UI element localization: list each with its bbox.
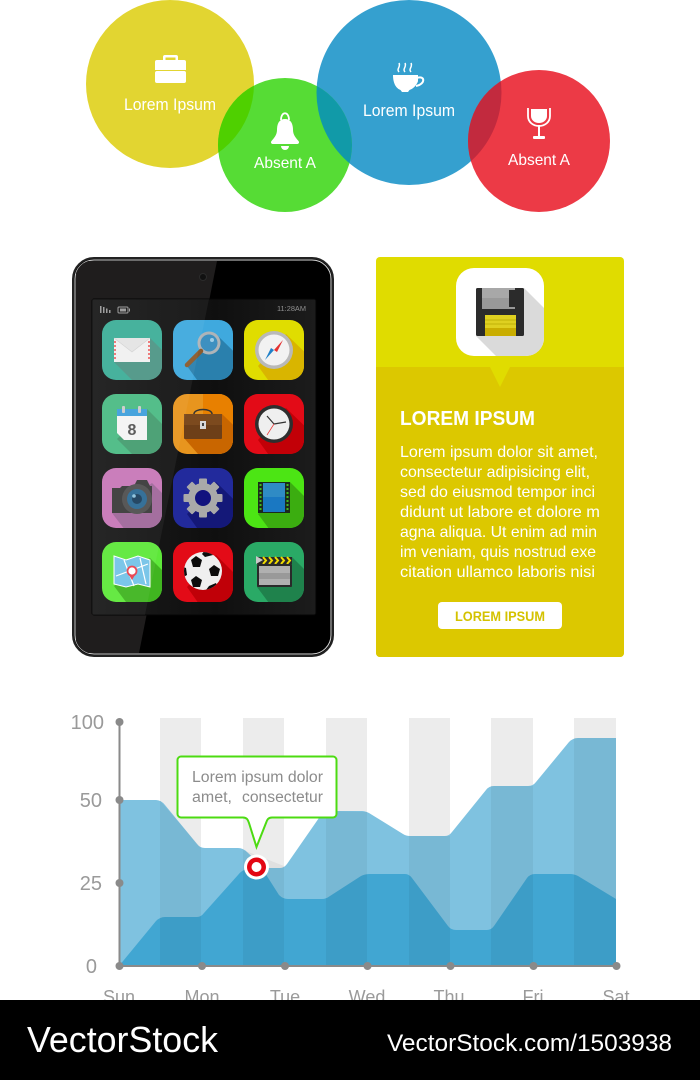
icon: gear (173, 468, 233, 528)
icon: calendar: 8 (128, 422, 137, 439)
x axis labels: Thu (433, 987, 465, 1007)
button (438, 602, 562, 629)
grey column stripes (160, 718, 616, 966)
status bar: 11:28AM (277, 306, 306, 313)
status bar (100, 306, 306, 313)
label: Lorem Ipsum yellow: Lorem Ipsum (124, 96, 216, 114)
icon: briefcase brown (173, 394, 233, 454)
circle: yellow Lorem Ipsum (86, 0, 254, 168)
x axis labels: Mon (184, 987, 220, 1007)
callout (178, 756, 336, 847)
tablet glare background (76, 261, 217, 653)
front area series (119, 867, 616, 966)
panel body text: citation ullamco laboris nisi (400, 564, 595, 581)
back area series (119, 738, 616, 966)
area chart (71, 712, 630, 1007)
label: Lorem Ipsum blue: Lorem Ipsum (363, 102, 455, 120)
icon: bell (271, 113, 299, 150)
icon: map (102, 542, 162, 602)
icon: magnifier (173, 320, 233, 380)
circle: red Absent A (468, 70, 610, 212)
tablet body (73, 258, 333, 656)
y axis labels (71, 712, 104, 978)
icon: mail (102, 320, 162, 380)
panel body text: Lorem ipsum dolor sit amet, (400, 444, 598, 461)
x axis labels: Sat (602, 987, 630, 1007)
icon: briefcase (155, 55, 186, 83)
panel body text: didunt ut labore et dolore m (400, 504, 600, 521)
axis dots (116, 718, 620, 970)
camera lens (200, 274, 206, 280)
icon: clapperboard (244, 542, 304, 602)
panel body text: consectetur adipisicing elit, (400, 464, 590, 481)
circles group (86, 0, 610, 212)
y axis labels: 100 (71, 712, 104, 734)
column shading over areas (160, 738, 616, 966)
footer bar (0, 1000, 700, 1080)
overlap: green and blue (316, 86, 352, 164)
panel body text (400, 444, 600, 581)
callout: amet, (192, 789, 232, 806)
footer logo: VectorStock (27, 1019, 219, 1060)
label: Absent A green: Absent A (254, 155, 316, 172)
panel bottom (376, 367, 624, 657)
y axis labels: 50 (80, 790, 102, 812)
panel: lorem ipsum card (376, 257, 624, 657)
x axis labels: Tue (270, 987, 300, 1007)
panel top (376, 257, 624, 657)
label: Absent A red: Absent A (508, 152, 570, 169)
x axis labels: Fri (522, 987, 544, 1007)
icon: camera (102, 468, 162, 528)
panel body text: agna aliqua. Ut enim ad min (400, 524, 597, 541)
x axis labels (104, 990, 630, 1000)
overlap: blue and red (468, 81, 502, 161)
icon: goblet (528, 108, 550, 139)
overlap: yellow and green (218, 86, 254, 152)
screen (92, 299, 316, 615)
callout: Lorem ipsum dolor (192, 769, 323, 786)
y axis labels: 25 (80, 873, 102, 895)
marker (244, 854, 269, 880)
pointer (490, 367, 510, 387)
y axis labels: 0 (86, 956, 97, 978)
icon: soccer ball (173, 542, 233, 602)
axes (120, 722, 616, 966)
icon: coffee cup (393, 63, 423, 92)
panel heading: LOREM IPSUM (400, 407, 535, 430)
circle: blue Lorem Ipsum (316, 0, 502, 185)
x axis labels: Sun (103, 987, 135, 1007)
footer url: VectorStock.com/1503938 (387, 1030, 672, 1057)
x axis labels: Wed (349, 987, 385, 1007)
tablet glare on icons (92, 299, 209, 615)
panel body text: sed do eiusmod tempor inci (400, 484, 595, 501)
circle: green Absent A (218, 78, 352, 212)
button: LOREM IPSUM (455, 609, 545, 624)
icon: film (244, 468, 304, 528)
tablet (73, 258, 344, 656)
icon: floppy disk (456, 268, 544, 356)
icon: compass (244, 320, 304, 380)
panel body text: im veniam, quis nostrud exe (400, 544, 596, 561)
icon: calendar (102, 394, 162, 454)
icon: clock (244, 394, 304, 454)
callout: consectetur (242, 789, 323, 806)
